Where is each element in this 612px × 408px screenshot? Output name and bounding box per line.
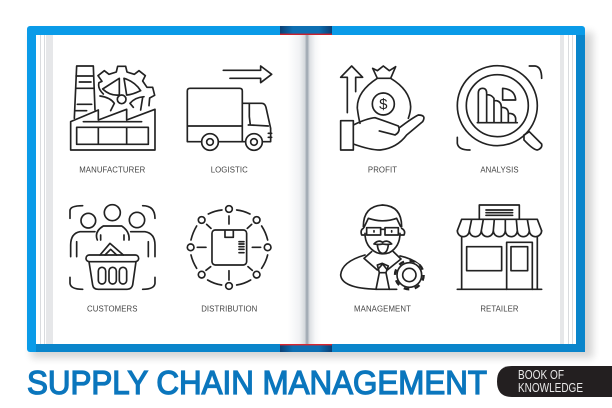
icon: logistic truck [187,66,272,150]
right page [307,35,576,344]
label: management: MANAGEMENT [354,304,411,314]
icon: management person with gear [341,205,424,289]
icon: analysis magnifier with chart [457,66,542,150]
title: SUPPLY CHAIN MANAGEMENT [27,364,487,401]
icon: customers with basket [70,205,155,289]
spine top band [280,26,332,35]
label: analysis: ANALYSIS [480,166,519,174]
icon: retailer storefront [457,205,542,289]
label: distribution: DISTRIBUTION [201,304,257,314]
open book [27,26,593,358]
badge: book of knowledge: KNOWLEDGE [518,381,583,395]
label: customers: CUSTOMERS [87,304,138,314]
label: retailer: RETAILER [480,304,519,314]
icon: distribution network [187,206,271,289]
badge: book of knowledge [497,366,612,397]
label: profit: PROFIT [368,166,397,174]
left page [36,35,307,344]
dollar sign: $ [379,96,388,113]
icon: manufacturer factory with gear [71,66,155,150]
spine bottom band [280,344,332,352]
label: manufacturer: MANUFACTURER [79,166,146,174]
label: logistic: LOGISTIC [211,166,248,174]
book cover [27,26,585,352]
badge: book of knowledge: BOOK OF [518,368,564,382]
icon: profit money bag in hand [341,66,424,150]
